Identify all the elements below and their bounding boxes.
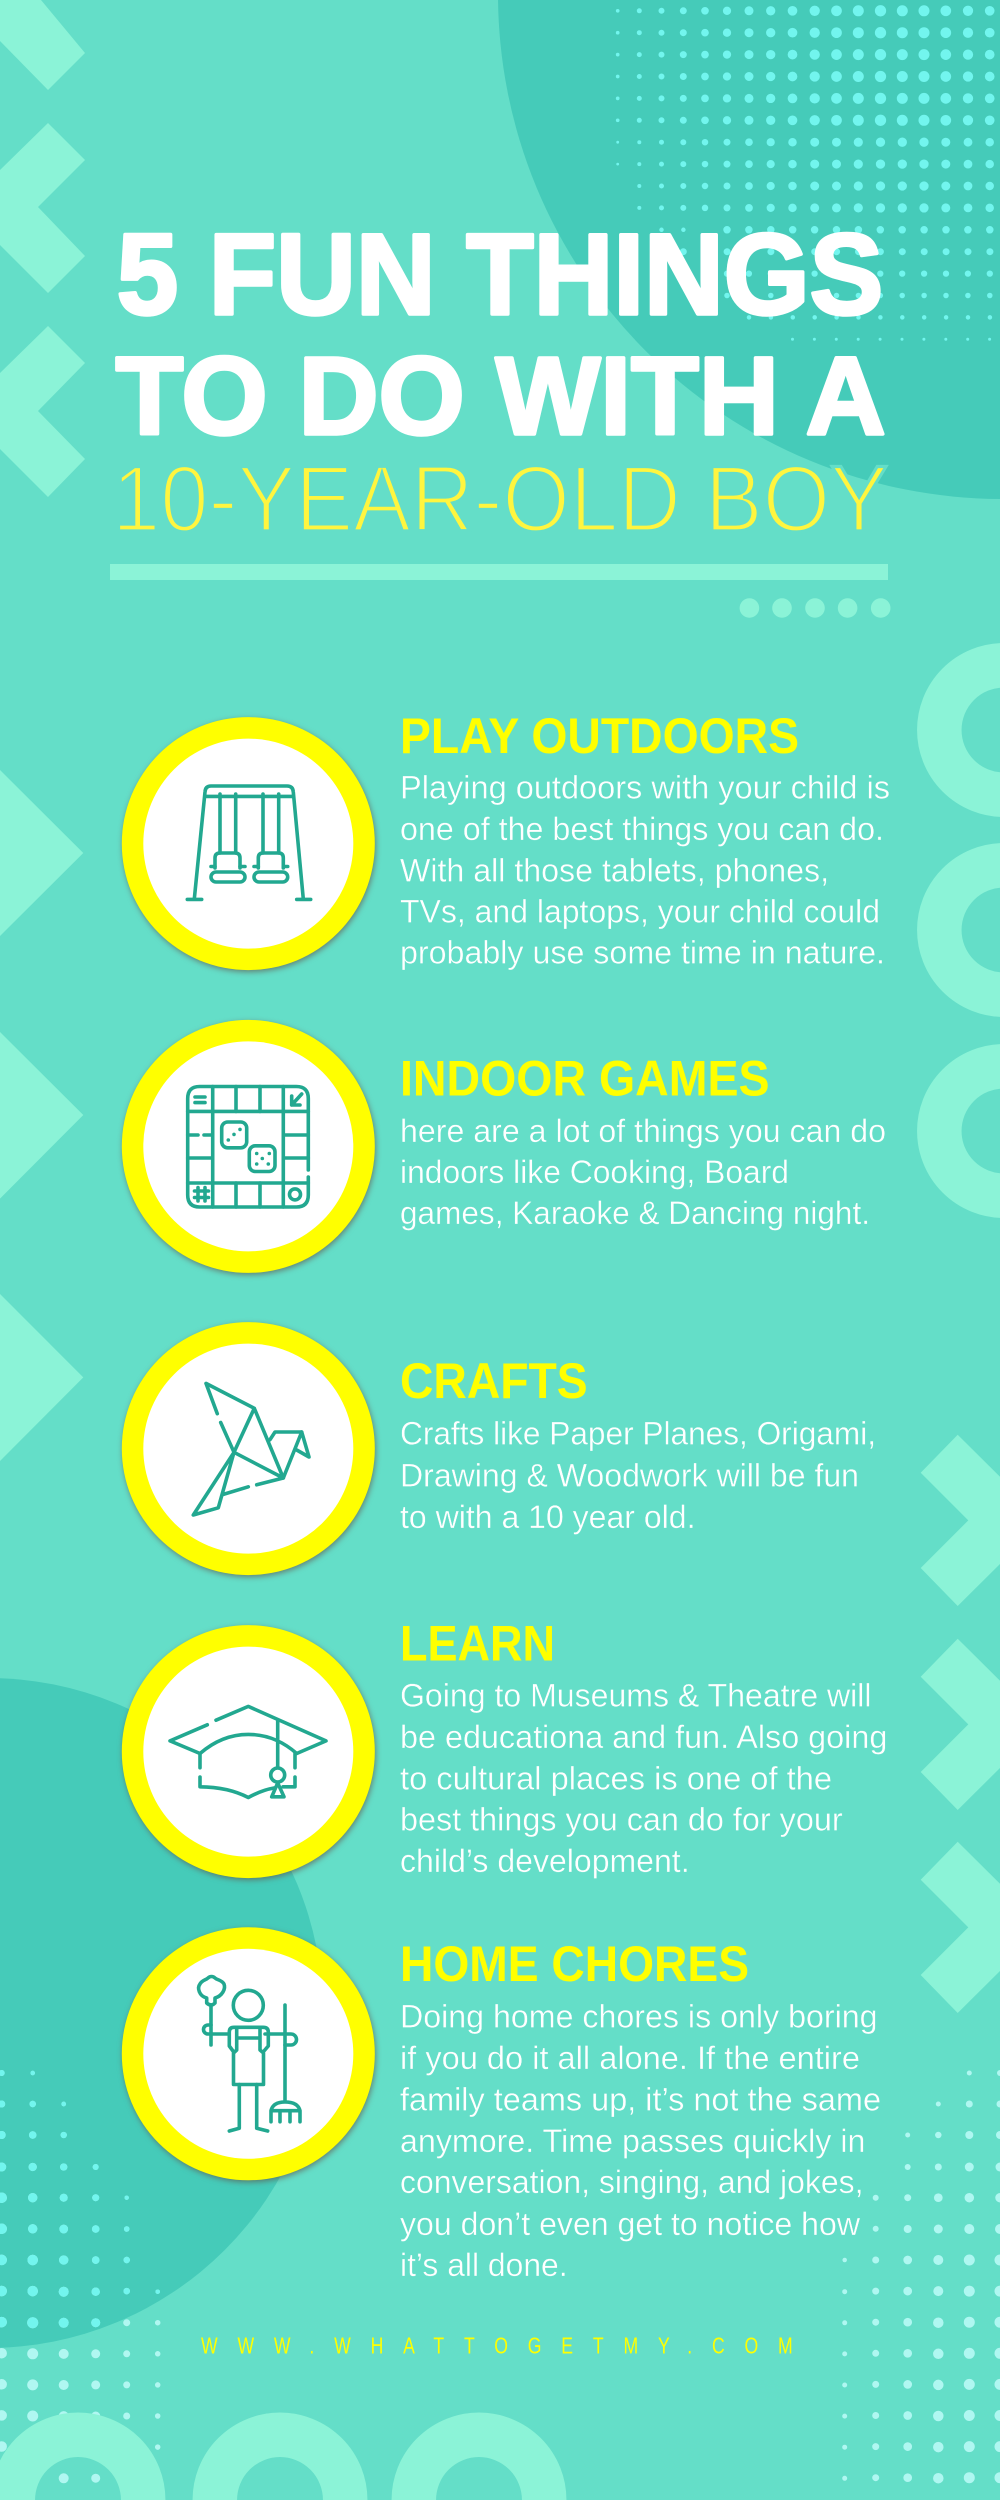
rings bottom [13, 2435, 544, 2500]
five dots under title [740, 598, 890, 618]
heading: LEARN [400, 1616, 555, 1672]
body text: best things you can do for your [400, 1802, 843, 1838]
body text [400, 1998, 881, 2283]
icon: person with duster and rake [199, 1976, 300, 2131]
halftone dots bottom left [2, 2073, 158, 2478]
badge: origami icon [122, 1322, 375, 1575]
body text: if you do it all alone. If the entire [400, 2040, 860, 2076]
decorative dark circle bottom left [0, 1678, 323, 2348]
body text: be educationa and fun. Also going [400, 1719, 887, 1755]
icon: graduation cap [170, 1706, 326, 1798]
panel: play outdoors [122, 708, 890, 970]
decorative dark circle top right [498, 0, 1000, 499]
body text: With all those tablets, phones, [400, 852, 829, 888]
badge: graduation cap icon [122, 1625, 375, 1878]
badge: chores icon [122, 1927, 375, 2180]
body text: TVs, and laptops, your child could [400, 894, 880, 930]
badge: swing icon [122, 717, 375, 970]
body text: Drawing & Woodwork will be fun [400, 1458, 859, 1494]
title: 10-YEAR-OLD BOY [112, 446, 888, 551]
body text [400, 1416, 876, 1535]
halftone dots bottom right [845, 2073, 1000, 2478]
body text: it’s all done. [400, 2247, 568, 2283]
heading: CRAFTS [400, 1353, 588, 1409]
title [112, 211, 888, 551]
chevrons right [921, 1435, 1000, 2013]
body text: to with a 10 year old. [400, 1499, 696, 1535]
body text: games, Karaoke & Dancing night. [400, 1195, 870, 1231]
body text: anymore. Time passes quickly in [400, 2123, 865, 2159]
body text: Playing outdoors with your child is [400, 770, 890, 806]
triangles left [0, 770, 83, 1461]
body text: you don’t even get to notice how [400, 2206, 861, 2242]
body text: here are a lot of things you can do [400, 1113, 886, 1149]
icon: board game [188, 1086, 308, 1207]
panel: crafts [122, 1322, 876, 1575]
halftone dots top right [618, 11, 990, 339]
body text: conversation, singing, and jokes, [400, 2164, 864, 2200]
body text [400, 1677, 887, 1879]
body text: family teams up, it’s not the same [400, 2082, 881, 2118]
heading: PLAY OUTDOORS [400, 708, 799, 764]
title: TO DO WITH A [116, 335, 886, 458]
badge: board game icon [122, 1020, 375, 1273]
body text: indoors like Cooking, Board [400, 1154, 789, 1190]
chevrons top left [0, 0, 85, 497]
body text: probably use some time in nature. [400, 934, 885, 970]
title underline bar [110, 564, 888, 580]
panel: indoor games [122, 1020, 886, 1273]
body text [400, 770, 890, 970]
body text: Crafts like Paper Planes, Origami, [400, 1416, 876, 1452]
icon: origami crane [193, 1383, 309, 1515]
body text [400, 1113, 886, 1231]
body text: to cultural places is one of the [400, 1760, 832, 1796]
heading: HOME CHORES [400, 1936, 749, 1992]
panel: home chores [122, 1927, 881, 2283]
footer website: WWW.WHATTOGETMY.COM [201, 2333, 793, 2359]
body text: child’s development. [400, 1843, 690, 1879]
body text: Going to Museums & Theatre will [400, 1677, 872, 1713]
rings right [939, 665, 1000, 1196]
icon: swing set [187, 786, 311, 899]
panel: learn [122, 1616, 887, 1879]
body text: Doing home chores is only boring [400, 1998, 878, 2034]
body text: one of the best things you can do. [400, 811, 884, 847]
title: 5 FUN THINGS [117, 211, 883, 339]
heading: INDOOR GAMES [400, 1050, 770, 1106]
